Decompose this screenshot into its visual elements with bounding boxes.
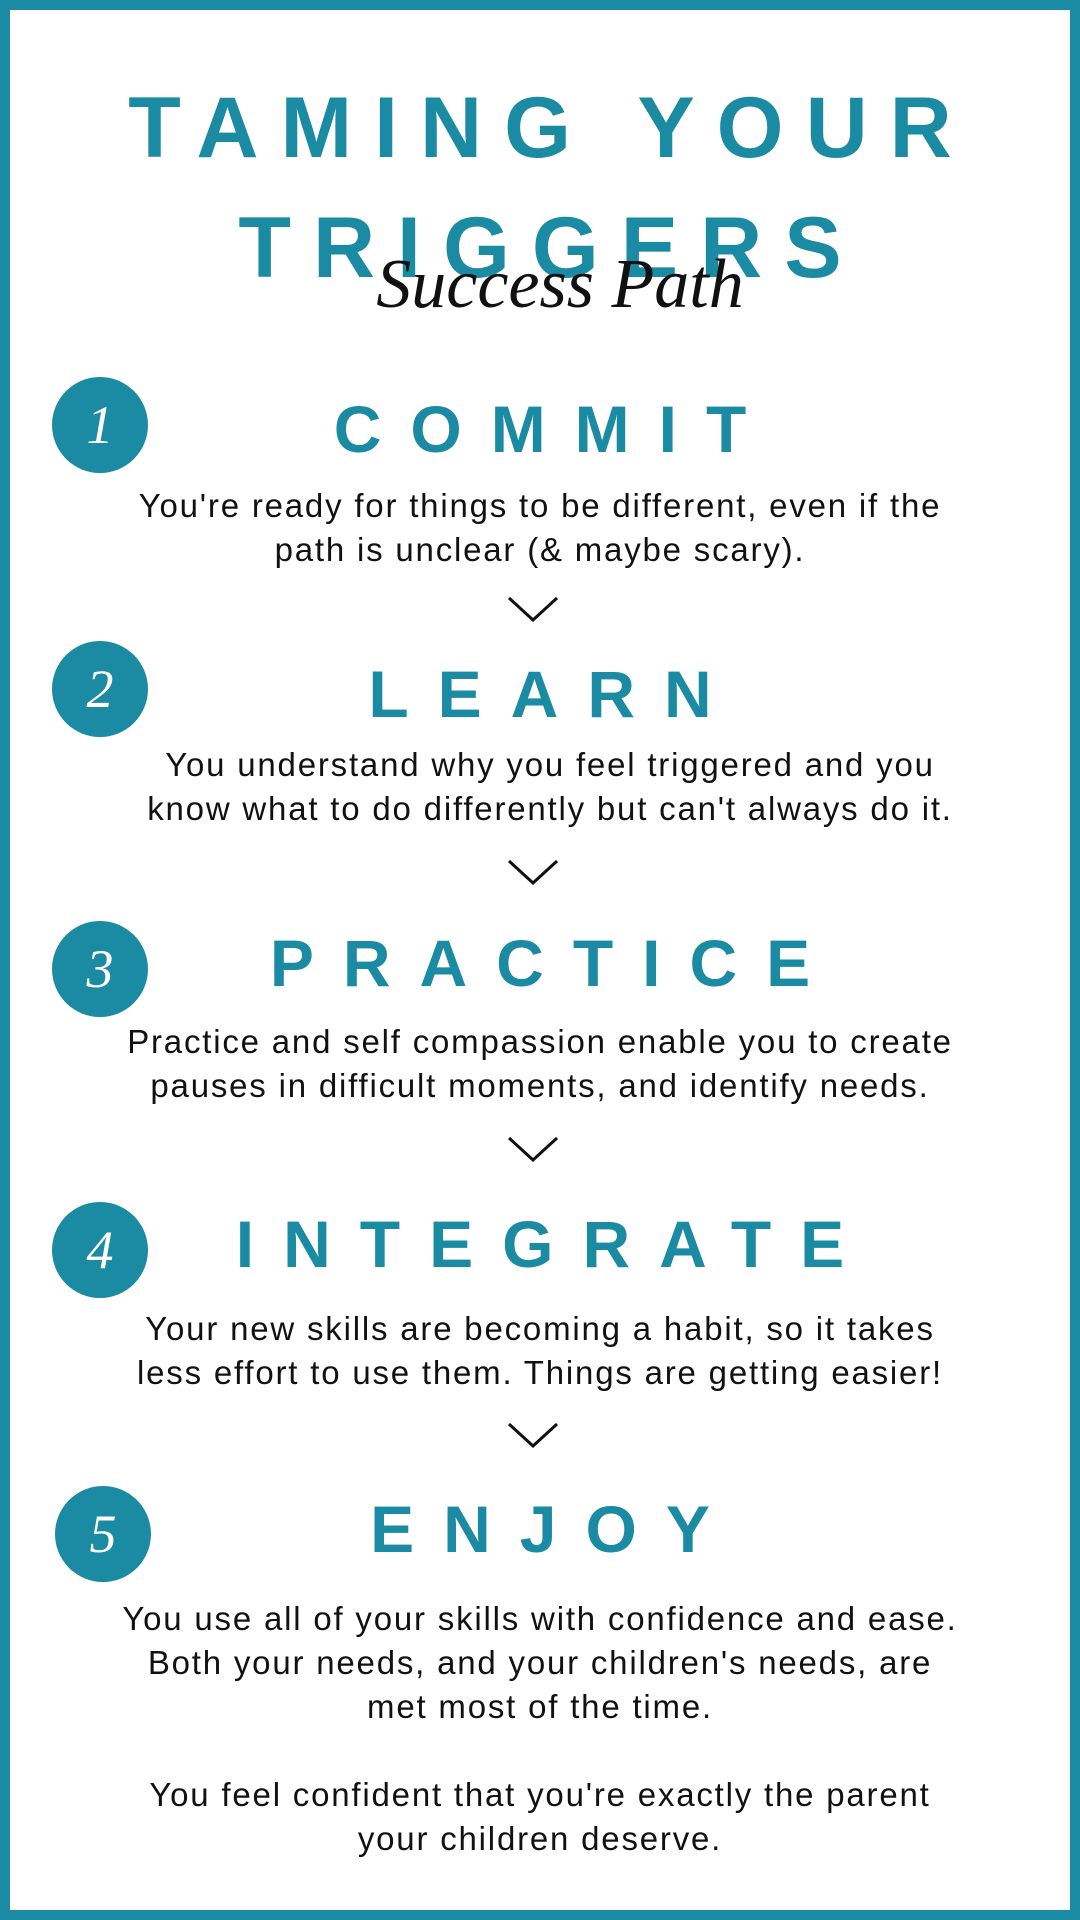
step 4 icon [52,1202,148,1298]
step 3 icon: 3 [86,939,114,999]
step 2 icon: 2 [86,659,114,719]
step 1 text: path is unclear (& maybe scary). [275,531,805,568]
step 4 text: less effort to use them. Things are getting easier! [137,1354,943,1391]
title [128,80,974,296]
arrow 3 [508,1136,558,1162]
step 5 heading: ENJOY [370,1492,739,1566]
step 2 text: know what to do differently but can't always do it. [147,790,953,827]
step 2 heading: LEARN [368,657,741,731]
step 4 text: Your new skills are becoming a habit, so it takes [145,1310,935,1347]
step 2 icon [52,641,148,737]
step 4 heading: INTEGRATE [236,1207,873,1281]
step 1 text: You're ready for things to be different, even if the [139,487,941,524]
step 3 icon [52,921,148,1017]
step 3 text: pauses in difficult moments, and identify needs. [150,1067,930,1104]
step 3 heading: PRACTICE [270,926,839,1000]
title: TRIGGERS [238,200,864,296]
arrow 1 [508,596,558,622]
step 2 text: You understand why you feel triggered and you [165,746,935,783]
step 5 text: your children deserve. [358,1820,722,1857]
step 1 icon: 1 [86,395,114,455]
step 5 text: met most of the time. [367,1688,713,1725]
arrow 4 [508,1422,558,1448]
step 3 text: Practice and self compassion enable you to create [127,1023,953,1060]
step 5 text: Both your needs, and your children's needs, are [148,1644,932,1681]
step 5 text: You use all of your skills with confidence and ease. [122,1600,958,1637]
step 3 text [127,1023,953,1104]
step 1 text [139,487,941,568]
subtitle script: Success Path [376,246,744,323]
title: TAMING YOUR [128,80,974,176]
step 2 text [147,746,953,827]
step 5 icon: 5 [90,1504,116,1564]
step 4 text [137,1310,943,1391]
step 5 text [122,1600,958,1857]
step 4 icon: 4 [86,1220,114,1280]
arrow 2 [508,860,558,885]
step 1 icon [52,377,148,473]
step 1 heading: COMMIT [334,392,775,466]
step 5 text: You feel confident that you're exactly the parent [149,1776,931,1813]
step 5 icon [55,1486,151,1582]
